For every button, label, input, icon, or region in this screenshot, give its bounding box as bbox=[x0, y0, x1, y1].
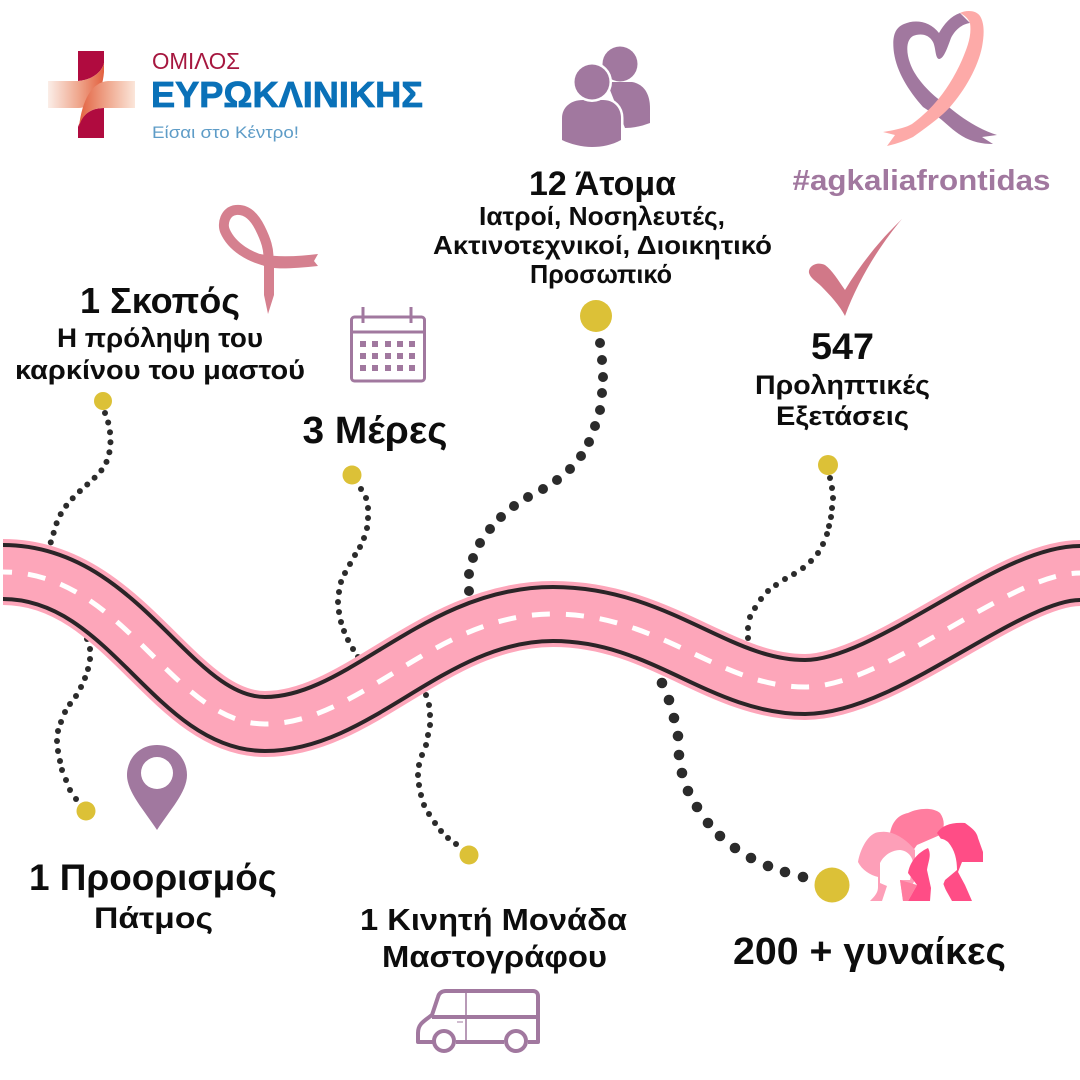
label: 1 Προορισμός: 1 Προορισμός bbox=[29, 857, 277, 898]
label: 1 Σκοπός: 1 Σκοπός bbox=[80, 280, 240, 321]
label: 547: Προληπτικές bbox=[755, 370, 930, 400]
icon: check mark bbox=[809, 219, 902, 316]
logo: Ομίλος Ευρωκλινικής: Είσαι στο Κέντρο! bbox=[152, 123, 299, 142]
icon: women silhouettes bbox=[858, 809, 983, 901]
dotted connector: 3 Μέρες bbox=[335, 486, 371, 660]
label: 1 Σκοπός: καρκίνου του μαστού bbox=[15, 355, 305, 385]
icon: location pin bbox=[127, 745, 187, 830]
label: 1 Κινητή Μονάδα Μαστογράφου bbox=[360, 902, 627, 974]
icon: heart ribbon bbox=[883, 11, 997, 146]
dotted connector: 12 Άτομα bbox=[464, 338, 608, 596]
dotted connector: 547 bbox=[745, 475, 836, 641]
label: 12 Άτομα: Προσωπικό bbox=[530, 259, 672, 289]
label: 1 Σκοπός: Η πρόληψη του bbox=[57, 323, 263, 353]
logo: Ομίλος Ευρωκλινικής: ΟΜΙΛΟΣ bbox=[152, 48, 240, 74]
label: 1 Προορισμός: Πάτμος bbox=[94, 902, 213, 935]
label: 1 Σκοπός bbox=[15, 280, 305, 385]
icon: pink ribbon bbox=[224, 210, 318, 314]
label: 12 Άτομα: 12 Άτομα bbox=[529, 165, 676, 203]
label: 1 Κινητή Μονάδα Μαστογράφου: 1 Κινητή Μονάδα bbox=[360, 902, 627, 937]
label: 200 + γυναίκες: 200 + γυναίκες bbox=[733, 931, 1006, 973]
dotted connector: 200 + γυναίκες bbox=[657, 678, 808, 882]
label: 12 Άτομα: Ακτινοτεχνικοί, Διοικητικό bbox=[433, 230, 772, 260]
label: 3 Μέρες: 3 Μέρες bbox=[302, 410, 448, 452]
dotted connector: 1 Σκοπός bbox=[50, 413, 110, 545]
label: 547: Εξετάσεις bbox=[776, 401, 909, 431]
dotted connector: 1 Προορισμός bbox=[54, 636, 93, 802]
label: 1 Προορισμός bbox=[29, 857, 277, 935]
hashtag: #agkaliafrontidas bbox=[792, 165, 1050, 197]
icon: people bbox=[562, 46, 650, 147]
label: 1 Κινητή Μονάδα Μαστογράφου: Μαστογράφου bbox=[382, 939, 607, 974]
icon: calendar bbox=[351, 307, 425, 381]
icon: mobile mammography van bbox=[418, 991, 538, 1051]
dotted connector: 1 Κινητή Μονάδα bbox=[415, 692, 459, 847]
logo: Ομίλος Ευρωκλινικής: ΕΥΡΩΚΛΙΝΙΚΗΣ bbox=[151, 74, 423, 115]
marker dots bbox=[76, 300, 850, 902]
label: 12 Άτομα bbox=[433, 165, 772, 289]
label: 547: 547 bbox=[811, 326, 874, 367]
label: 547 bbox=[755, 326, 930, 431]
road bbox=[3, 572, 1080, 724]
label: 12 Άτομα: Ιατροί, Νοσηλευτές, bbox=[479, 201, 725, 231]
logo: Ομίλος Ευρωκλινικής bbox=[48, 48, 423, 142]
